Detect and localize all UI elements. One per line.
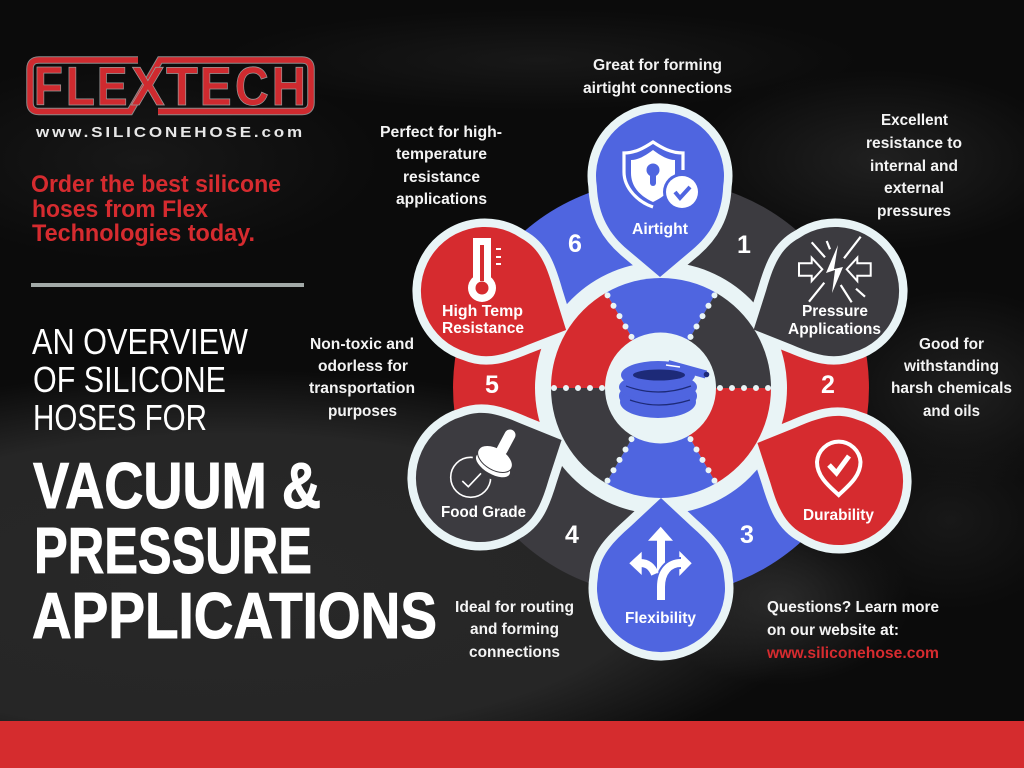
center hub (605, 332, 716, 444)
pin: flexibility (597, 498, 725, 652)
title: vacuum and pressure applications (32, 449, 437, 652)
note: chemicals: harsh chemicals (891, 380, 1012, 397)
icon: branching arrows (629, 527, 692, 600)
label: high temp resistance (442, 303, 524, 337)
logo: Flextech (30, 55, 311, 141)
note: airtight: airtight connections (583, 80, 732, 97)
note: non-toxic: purposes (328, 403, 397, 420)
note: pressure: Excellent (881, 112, 948, 129)
note: high temperature: resistance (403, 169, 480, 186)
logo: Flextech: C (235, 55, 269, 117)
logo: Flextech: L (66, 55, 95, 117)
label: durability: Durability (803, 507, 874, 524)
label: flexibility: Flexibility (625, 610, 696, 627)
logo: Flextech: www.SILICONEHOSE.com (35, 124, 305, 141)
label: high temp resistance: High Temp (442, 303, 523, 320)
logo: Flextech: E (97, 55, 128, 117)
icon: food grade fitting with check (451, 435, 521, 497)
note: questions and website: Questions? Learn more (767, 599, 939, 616)
note: routing: connections (469, 644, 560, 661)
pin: durability (730, 385, 924, 566)
outer segment 4 (481, 388, 661, 596)
wheel diagram (395, 112, 924, 652)
outer segment 2 (661, 284, 869, 492)
call to action text (31, 171, 281, 247)
title: vacuum and pressure applications: VACUUM & (33, 449, 321, 522)
note: pressure: resistance to (866, 135, 962, 152)
note: pressure: external (884, 180, 944, 197)
note: questions and website: on our website at: (767, 622, 899, 639)
note: non-toxic: Non-toxic and (310, 336, 414, 353)
note: chemicals: Good for (919, 336, 984, 353)
note: chemicals: and oils (923, 403, 980, 420)
note: airtight: Great for forming (593, 57, 722, 74)
bottom red bar (0, 721, 1024, 768)
number 5: 5 (485, 371, 499, 399)
note: pressure (866, 112, 962, 220)
number 3: 3 (740, 521, 754, 549)
pin: pressure applications (726, 206, 920, 387)
icon: shield with keyhole (624, 142, 701, 211)
note: routing: and forming (470, 621, 559, 638)
logo: Flextech: X (131, 56, 165, 117)
call to action text: Order the best silicone (31, 171, 281, 198)
call to action text: Technologies today. (32, 220, 255, 247)
title: vacuum and pressure applications: APPLICATIONS (32, 579, 437, 652)
number 1: 1 (737, 231, 751, 259)
note: high temperature: temperature (396, 146, 487, 163)
note: non-toxic (309, 336, 415, 420)
label: high temp resistance: Resistance (442, 320, 524, 337)
note: airtight (583, 57, 732, 97)
outer segment 1 (661, 180, 841, 388)
title: vacuum and pressure applications: PRESSURE (34, 514, 312, 587)
note: high temperature (380, 124, 502, 208)
title: overview lines: AN OVERVIEW (32, 321, 248, 362)
logo: Flextech: F (34, 55, 63, 117)
note: routing: Ideal for routing (455, 599, 574, 616)
number 2: 2 (821, 371, 835, 399)
label: airtight: Airtight (632, 221, 688, 238)
icon: coiled blue hose (619, 361, 709, 418)
number 6: 6 (568, 230, 582, 258)
title: overview lines: OF SILICONE (33, 359, 226, 400)
label: pressure applications: Pressure (802, 303, 868, 320)
note: pressure: pressures (877, 203, 951, 220)
label: pressure applications (788, 303, 881, 338)
logo: Flextech: T (166, 56, 198, 117)
note: non-toxic: transportation (309, 380, 415, 397)
note: questions and website: www.siliconehose.com (766, 645, 939, 662)
icon: lightning and pressure arrows (799, 237, 871, 302)
pin: food grade (395, 382, 589, 563)
note: high temperature: applications (396, 191, 487, 208)
note: high temperature: Perfect for high- (380, 124, 502, 141)
title: overview lines: HOSES FOR (33, 397, 207, 438)
outer segment 3 (661, 388, 841, 596)
icon: thermometer (468, 238, 501, 302)
logo: Flextech: E (200, 55, 232, 117)
outer segment 6 (481, 180, 661, 388)
label: food grade: Food Grade (441, 504, 526, 521)
logo: Flextech: H (272, 56, 306, 117)
note: questions and website (766, 599, 939, 662)
inner disc (551, 278, 771, 498)
label: pressure applications: Applications (788, 321, 881, 338)
note: pressure: internal and (870, 158, 958, 175)
icon: location check mark (817, 442, 860, 495)
call to action text: hoses from Flex (32, 196, 209, 223)
pin: airtight (596, 112, 724, 277)
note: non-toxic: odorless for (318, 358, 408, 375)
number 4: 4 (565, 521, 579, 549)
note: chemicals (891, 336, 1012, 420)
outer segment 5 (453, 284, 661, 492)
title: overview lines (32, 321, 248, 438)
pin: high temp resistance (399, 206, 594, 388)
note: chemicals: withstanding (903, 358, 999, 375)
note: routing (455, 599, 574, 661)
